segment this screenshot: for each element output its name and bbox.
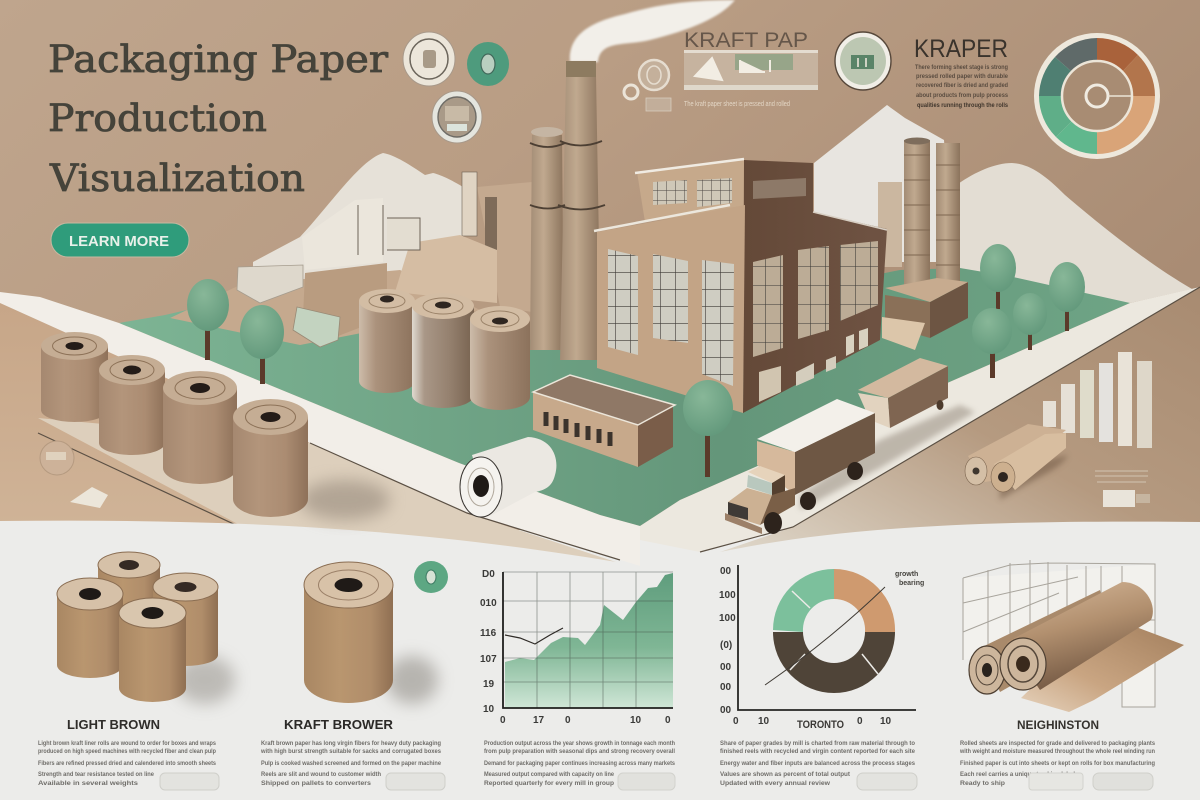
sheet bbox=[1021, 627, 1184, 712]
truck box front bbox=[757, 441, 795, 495]
delivery truck bbox=[725, 399, 875, 534]
body text: Fibers are refined pressed dried and calendered into smooth sheets bbox=[38, 760, 216, 767]
title: Production bbox=[48, 97, 267, 140]
button bbox=[160, 773, 219, 790]
axis labels bbox=[719, 566, 892, 727]
truck cab bbox=[725, 466, 795, 534]
lawn bbox=[119, 268, 1130, 526]
axis labels: 100 bbox=[719, 613, 736, 624]
panel: area chart bbox=[480, 569, 675, 790]
button bbox=[857, 773, 917, 790]
button 1 bbox=[1029, 773, 1083, 790]
title: Visualization bbox=[49, 157, 305, 200]
background: kraft wall bbox=[0, 0, 1200, 530]
left machine box bbox=[237, 265, 303, 303]
road shading under trucks bbox=[800, 405, 975, 510]
road edge lines bbox=[38, 287, 1200, 560]
front roll bbox=[119, 598, 186, 702]
kraft pap caption lines: The kraft paper sheet is pressed and rolled bbox=[684, 101, 790, 108]
factory main building bbox=[594, 159, 887, 413]
bottom white panel bbox=[0, 521, 1200, 800]
back roll 3 bbox=[470, 306, 530, 410]
left roll bbox=[57, 578, 123, 678]
body text: Share of paper grades by mill is charted from raw material through to bbox=[720, 740, 915, 747]
big roll shadow bbox=[386, 656, 438, 704]
factory tan front bbox=[597, 205, 745, 413]
kraft rolls on ground bbox=[965, 424, 1068, 500]
factory front windows bbox=[608, 249, 734, 386]
axis labels: 116 bbox=[480, 628, 497, 639]
tree 7 bbox=[972, 308, 1012, 378]
label: kraft pap bbox=[684, 29, 818, 108]
icon: green seal bbox=[835, 32, 891, 90]
title: Packaging Paper bbox=[48, 38, 388, 81]
small gabled building bbox=[533, 375, 675, 467]
axis labels: 0 bbox=[500, 715, 506, 726]
kraper body text: qualities running through the rolls bbox=[917, 103, 1009, 109]
body text: produced on high speed machines with recycled fiber and clean pulp bbox=[38, 748, 216, 755]
icon: green dot bbox=[414, 561, 448, 593]
icon: roll badge bbox=[403, 32, 455, 86]
factory brown side bbox=[743, 160, 887, 413]
chimneys: right pair bbox=[878, 138, 960, 288]
factory upper tan block bbox=[637, 160, 745, 222]
axis labels bbox=[480, 569, 671, 726]
roll cluster shadow bbox=[175, 656, 235, 704]
body text: Energy water and fiber inputs are balanced across the process stages bbox=[720, 760, 915, 767]
axis labels: 100 bbox=[719, 590, 736, 601]
body text: Light brown kraft liner rolls are wound to order for boxes and wraps bbox=[38, 740, 216, 747]
body text bbox=[38, 740, 216, 787]
button 2 bbox=[1093, 773, 1153, 790]
kraper body text: There forming sheet stage is strong bbox=[915, 65, 1008, 71]
kraper body text: about products from pulp process bbox=[916, 93, 1009, 99]
body text: finished reels with recycled and virgin content reported for each site bbox=[720, 748, 915, 755]
label: kraper bbox=[914, 35, 1009, 109]
tree 1 bbox=[187, 279, 229, 360]
tree 5 bbox=[1049, 262, 1085, 331]
donut labels bbox=[895, 571, 924, 587]
axis labels: 17 bbox=[533, 715, 545, 726]
kraft pap image panel bbox=[684, 50, 818, 90]
body text: from pulp preparation with seasonal dips and strong recovery overall bbox=[484, 748, 675, 755]
road right bbox=[640, 287, 1200, 552]
axis labels: D0 bbox=[482, 569, 495, 580]
axis labels: 00 bbox=[720, 705, 732, 716]
axis labels: 0 bbox=[857, 716, 863, 727]
centre tank bbox=[303, 263, 387, 338]
axis labels: 19 bbox=[483, 679, 495, 690]
body text: Finished paper is cut into sheets or kept on rolls for box manufacturing bbox=[960, 760, 1155, 767]
button: learn more: LEARN MORE bbox=[69, 233, 169, 250]
front roll 1 bbox=[41, 332, 108, 422]
trees bbox=[187, 244, 1085, 477]
heading: toronto: TORONTO bbox=[797, 719, 844, 731]
kraper body text: pressed rolled paper with durable bbox=[916, 74, 1009, 80]
body text: Measured output compared with capacity on line bbox=[484, 771, 614, 778]
front roll 4 bbox=[233, 399, 308, 517]
icon: window badge bbox=[432, 91, 482, 143]
axis labels: 0 bbox=[565, 715, 571, 726]
axis labels: 010 bbox=[480, 598, 497, 609]
back roll bbox=[969, 590, 1110, 694]
right building bbox=[395, 235, 497, 303]
roll shadow on ground bbox=[300, 480, 390, 520]
body text: Ready to ship bbox=[960, 780, 1005, 787]
label: kraper: KRAPER bbox=[914, 35, 1008, 63]
grid backdrop bbox=[963, 560, 1155, 707]
truck wheels bbox=[764, 512, 782, 534]
body text: with high burst strength suitable for sacks and corrugated boxes bbox=[260, 748, 441, 755]
front roll 3 bbox=[163, 371, 237, 484]
tree 2 bbox=[240, 305, 284, 384]
back roll bbox=[98, 552, 160, 640]
panel: light brown bbox=[38, 552, 235, 790]
button bbox=[618, 773, 675, 790]
back block bbox=[477, 182, 532, 312]
donut chart: top right bbox=[1034, 33, 1160, 159]
axes bbox=[738, 565, 916, 710]
body text: Demand for packaging paper continues increasing across many markets bbox=[484, 760, 675, 767]
body text bbox=[720, 740, 915, 787]
button bbox=[386, 773, 445, 790]
ground: right tan bbox=[720, 287, 1200, 552]
donut labels: growth bbox=[895, 571, 918, 578]
axis labels: 107 bbox=[480, 654, 497, 665]
big roll bbox=[304, 562, 393, 703]
small data key on ground bbox=[1095, 471, 1150, 507]
title bbox=[48, 38, 388, 200]
body text: Kraft brown paper has long virgin fibers for heavy duty packaging bbox=[261, 740, 441, 747]
tree 4 bbox=[980, 244, 1016, 309]
axis labels: 00 bbox=[720, 566, 732, 577]
donut labels: bearing bbox=[899, 580, 924, 587]
label: kraft pap: KRAFT PAP bbox=[684, 29, 808, 52]
factory upper windows bbox=[653, 178, 806, 207]
axis labels: 10 bbox=[483, 704, 495, 715]
panel: kraft brown bbox=[260, 561, 448, 790]
upper white machinery bbox=[302, 198, 383, 270]
back roll 2 bbox=[412, 293, 474, 408]
body text: Reported quarterly for every mill in group bbox=[484, 780, 614, 787]
back roll 1 bbox=[359, 289, 415, 393]
body text bbox=[959, 740, 1155, 787]
truck box side bbox=[795, 413, 875, 495]
small truck bbox=[858, 358, 948, 428]
heading: neighinston: NEIGHINSTON bbox=[1017, 718, 1099, 732]
body text: Rolled sheets are inspected for grade and delivered to packaging plants bbox=[960, 740, 1155, 747]
ground icon marks bbox=[40, 441, 108, 508]
kraper body text bbox=[915, 65, 1009, 109]
left process plant bbox=[170, 172, 532, 347]
axis labels: 0 bbox=[733, 716, 739, 727]
button: learn more bbox=[51, 223, 189, 257]
axis labels: 00 bbox=[720, 682, 732, 693]
plant ground patch bbox=[170, 270, 480, 345]
white roll on its side bbox=[460, 437, 556, 517]
body text: Strength and tear resistance tested on line bbox=[38, 771, 154, 778]
body text bbox=[260, 740, 441, 787]
heading: kraft brower: KRAFT BROWER bbox=[284, 717, 394, 732]
rolls: front row bbox=[41, 332, 308, 517]
ground: cream band bbox=[38, 418, 640, 570]
donut bbox=[765, 569, 895, 693]
right roll bbox=[153, 573, 218, 666]
body text: Reels are slit and wound to customer width bbox=[261, 771, 381, 778]
glass bay bbox=[293, 307, 340, 347]
axis labels: 10 bbox=[880, 716, 892, 727]
icon: green badge bbox=[467, 42, 509, 86]
front roll 2 bbox=[99, 355, 165, 455]
body text: with weight and moisture measured throughout the whole reel winding run bbox=[959, 748, 1155, 755]
axis labels: (0) bbox=[720, 640, 732, 651]
body text: Pulp is cooked washed screened and formed on the paper machine bbox=[261, 760, 441, 767]
panel: rolled paper bbox=[959, 560, 1184, 790]
body text: Values are shown as percent of total output bbox=[720, 771, 851, 778]
bar chart on ground bbox=[1043, 352, 1152, 448]
road left bbox=[0, 292, 640, 566]
kraper body text: recovered fiber is dried and graded bbox=[916, 83, 1008, 89]
body text: Updated with every annual review bbox=[720, 780, 831, 787]
pale tower bbox=[462, 172, 477, 236]
truck box top bbox=[757, 399, 875, 452]
heading: light brown: LIGHT BROWN bbox=[67, 717, 160, 732]
right annex building bbox=[882, 278, 968, 350]
tree 6 bbox=[1013, 293, 1047, 350]
body text: Each reel carries a unique tracking label bbox=[960, 771, 1075, 778]
panel: donut chart bbox=[719, 565, 924, 790]
smoke plume bbox=[570, 0, 735, 62]
ground: left tan bbox=[0, 303, 310, 540]
axis labels: 10 bbox=[758, 716, 770, 727]
front roll bbox=[1000, 582, 1153, 690]
chimney: tall pair bbox=[530, 61, 605, 360]
body text: Production output across the year shows growth in tonnage each month bbox=[484, 740, 675, 747]
body text: Available in several weights bbox=[38, 780, 138, 787]
rolls: back row on lawn bbox=[359, 289, 530, 410]
axis labels: 0 bbox=[665, 715, 671, 726]
axis labels: 10 bbox=[630, 715, 642, 726]
area chart plot bbox=[503, 572, 673, 708]
body text: Shipped on pallets to converters bbox=[261, 780, 371, 787]
mountains bbox=[253, 105, 1192, 303]
factory side windows bbox=[753, 241, 878, 402]
icon: leaf badge bbox=[624, 60, 671, 111]
tree 3 bbox=[683, 380, 733, 477]
body text bbox=[484, 740, 675, 787]
axis labels: 00 bbox=[720, 662, 732, 673]
